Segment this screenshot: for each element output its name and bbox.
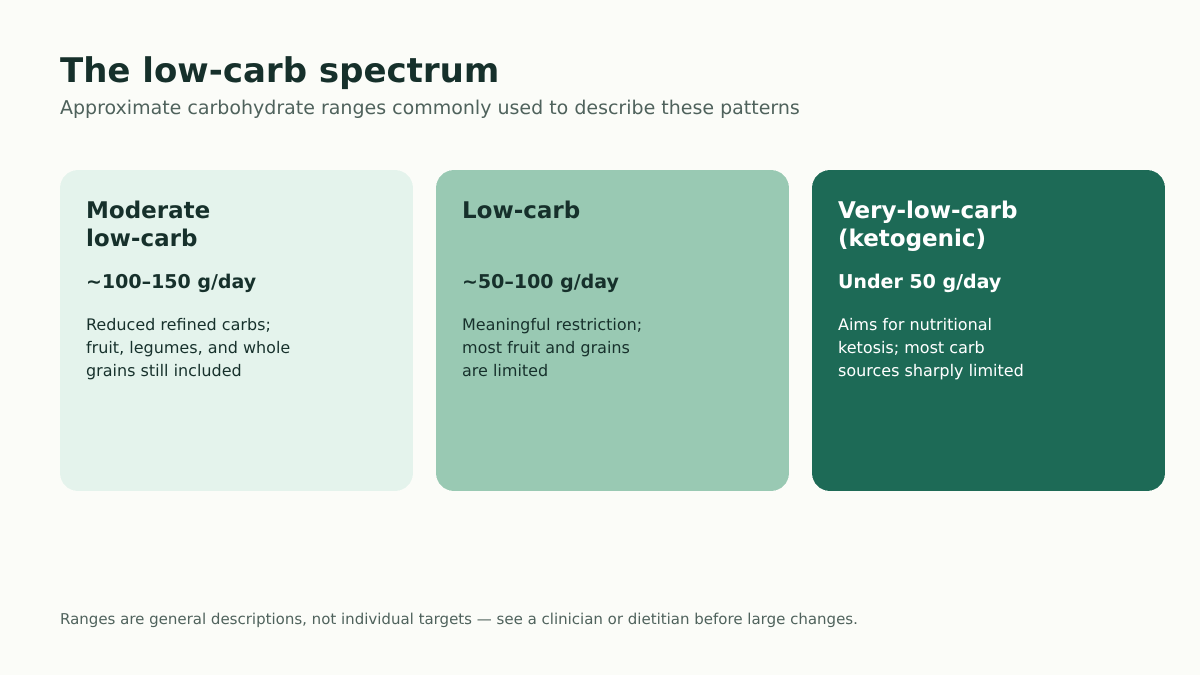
description: very-low-carb: Aims for nutritional xyxy=(838,315,992,334)
description: very-low-carb xyxy=(838,315,1024,380)
panel: very-low-carb xyxy=(812,170,1165,491)
heading: moderate low-carb: Moderate xyxy=(86,198,210,224)
panel: low-carb xyxy=(436,170,789,491)
heading: low-carb: Low-carb xyxy=(462,198,580,224)
description: low-carb: most fruit and grains xyxy=(462,338,630,357)
description: very-low-carb: ketosis; most carb xyxy=(838,338,985,357)
description: moderate low-carb: fruit, legumes, and whole xyxy=(86,338,290,357)
description: low-carb: are limited xyxy=(462,361,548,380)
heading: very-low-carb xyxy=(838,198,1017,252)
heading: moderate low-carb xyxy=(86,198,210,252)
description: low-carb xyxy=(462,315,642,380)
description: low-carb: Meaningful restriction; xyxy=(462,315,642,334)
panel: moderate low-carb xyxy=(60,170,413,491)
heading: moderate low-carb: low-carb xyxy=(86,226,197,252)
title: The low-carb spectrum xyxy=(60,51,499,91)
range: very-low-carb: Under 50 g/day xyxy=(838,271,1001,293)
footnote: Ranges are general descriptions, not individual targets — see a clinician or dietitian before large changes. xyxy=(60,610,858,628)
range: low-carb: ~50–100 g/day xyxy=(462,271,619,293)
description: moderate low-carb: Reduced refined carbs; xyxy=(86,315,271,334)
heading: very-low-carb: (ketogenic) xyxy=(838,226,986,252)
range: moderate low-carb: ~100–150 g/day xyxy=(86,271,256,293)
description: very-low-carb: sources sharply limited xyxy=(838,361,1024,380)
description: moderate low-carb: grains still included xyxy=(86,361,242,380)
heading: very-low-carb: Very-low-carb xyxy=(838,198,1017,224)
description: moderate low-carb xyxy=(86,315,290,380)
subtitle: Approximate carbohydrate ranges commonly used to describe these patterns xyxy=(60,97,800,119)
